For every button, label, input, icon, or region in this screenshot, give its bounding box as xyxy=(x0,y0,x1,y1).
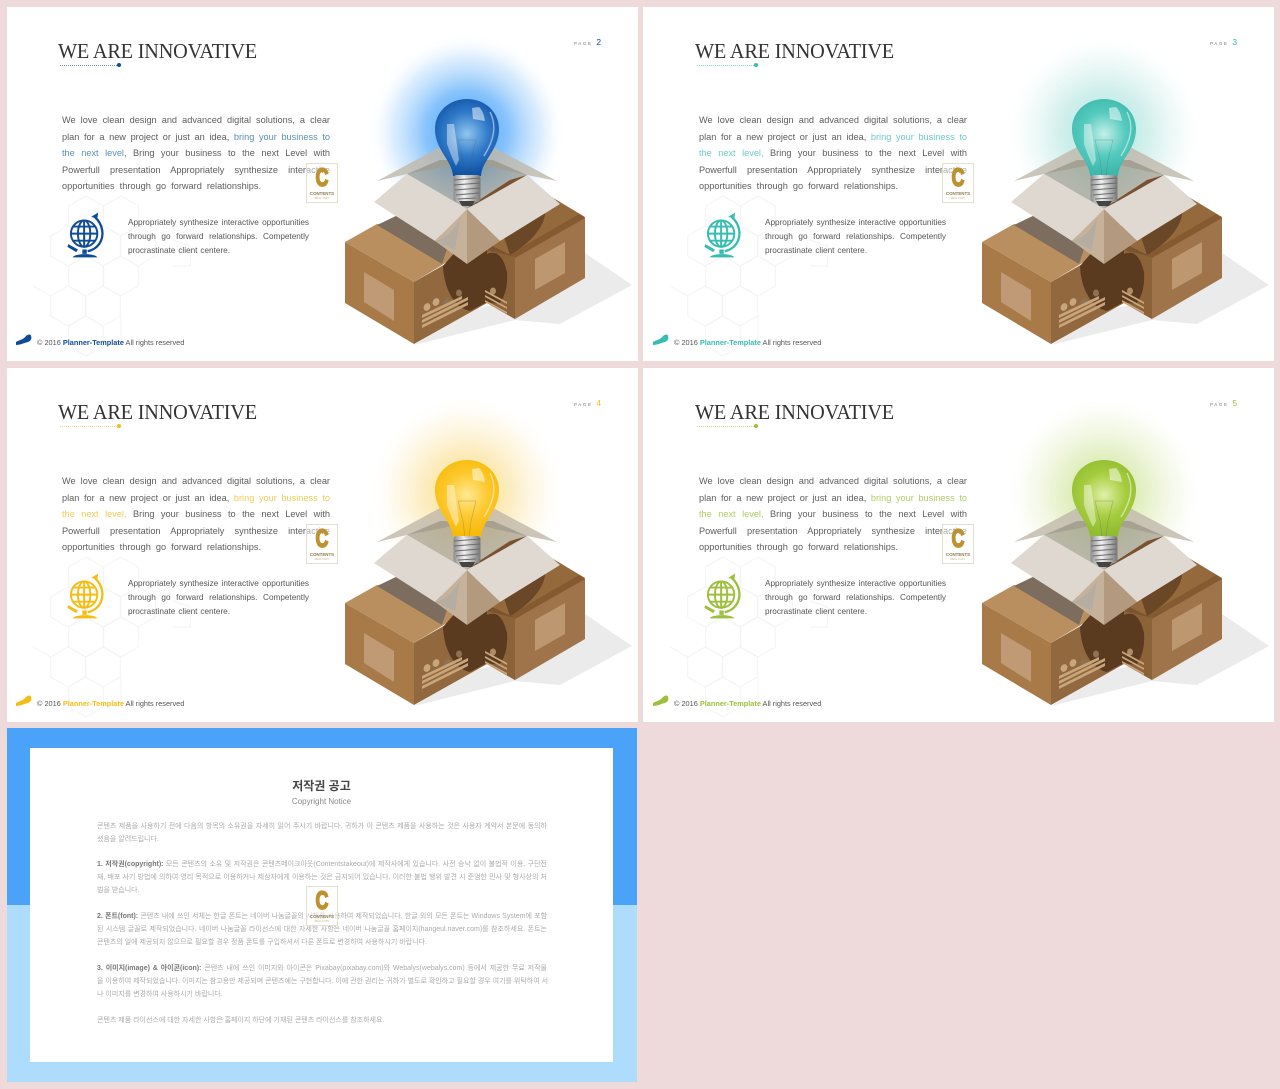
section 2 line 3: 콘텐츠의 일에 제공되지 않으므로 필요할 경우 정품 폰트를 구입하셔서 다른 폰트로 변경하여 사용하시기 바랍니다. xyxy=(97,939,427,946)
watermark xyxy=(942,163,974,203)
watermark: REAL COPY xyxy=(315,558,329,561)
watermark: CONTENTS xyxy=(310,191,334,196)
icon: shoe xyxy=(16,334,32,345)
illustration: blue bulb in box xyxy=(34,45,632,356)
panel: copyright notice background xyxy=(7,728,637,1082)
sub paragraph: through go forward relationships. Competently xyxy=(128,593,309,602)
sub paragraph: procrastinate client centere. xyxy=(128,607,230,616)
icon: shoe xyxy=(653,696,668,706)
page number: PAGE 3 xyxy=(1210,37,1237,47)
watermark: CONTENTS xyxy=(310,552,334,557)
body paragraph: opportunities through go forward relationships. xyxy=(699,542,898,552)
illustration: green bulb in box xyxy=(670,412,1268,718)
watermark: C xyxy=(316,524,328,553)
title: WE ARE INNOVATIVE xyxy=(58,400,257,424)
body paragraph: plan for a new project or just an idea, bring your business to xyxy=(62,132,330,142)
body paragraph: Powerfull presentation Appropriately synthesize interactive xyxy=(699,526,967,536)
watermark xyxy=(306,886,338,926)
panel: copyright notice xyxy=(30,748,613,1062)
body paragraph: We love clean design and advanced digital solutions, a clear xyxy=(62,115,330,125)
notice intro: 콘텐츠 제품을 사용하기 전에 다음의 항목의 소유권을 자세히 읽어 주시기 바랍니다. 귀하가 이 콘텐츠 제품을 사용하는 것은 사용자 계약서 본문에 동의하 xyxy=(97,823,547,830)
watermark: REAL COPY xyxy=(951,197,965,200)
page number: PAGE 5 xyxy=(1210,398,1237,408)
closing line: 콘텐츠 제품 라이선스에 대한 자세한 사항은 홈페이지 하단에 기재된 콘텐츠 라이선스를 참조하세요. xyxy=(97,1017,384,1024)
icon: globe xyxy=(67,212,104,258)
footer: © 2016 Planner-Template All rights reserved xyxy=(674,338,821,347)
watermark: C xyxy=(316,163,328,192)
title underline xyxy=(697,424,758,428)
watermark xyxy=(306,163,338,203)
watermark: C xyxy=(316,886,328,915)
section 1 line 2: 재, 배포 사기 방법에 의하여 영리 목적으로 이용하거나 제삼자에게 이용하는 것은 금지되어 있습니다. 이러한 불법 행위 발견 시 준엄한 민사 및 형사상의 처 xyxy=(97,874,547,881)
footer: © 2016 Planner-Template All rights reserved xyxy=(674,699,821,708)
icon: globe xyxy=(67,574,104,618)
sub paragraph xyxy=(128,218,309,255)
body paragraph: We love clean design and advanced digital solutions, a clear xyxy=(62,476,330,486)
title: WE ARE INNOVATIVE xyxy=(695,400,894,424)
body paragraph: opportunities through go forward relationships. xyxy=(699,181,898,191)
title underline xyxy=(60,424,121,428)
section 1: 1. 저작권(copyright): 모든 콘텐츠의 소유 및 저작권은 콘텐츠메이크아웃(Contentstakeout)에 제작사에게 있습니다. 사전 승낙 없이 불법적 이용, 구단전 xyxy=(97,861,547,868)
sub paragraph xyxy=(765,218,946,255)
sub paragraph: Appropriately synthesize interactive opportunities xyxy=(765,579,946,588)
sub paragraph: Appropriately synthesize interactive opportunities xyxy=(128,579,309,588)
body paragraph: Powerfull presentation Appropriately synthesize interactive xyxy=(62,526,330,536)
icon: globe xyxy=(704,574,741,618)
sub paragraph: procrastinate client centere. xyxy=(765,246,867,255)
illustration: yellow bulb in box xyxy=(34,411,632,718)
body paragraph: We love clean design and advanced digital solutions, a clear xyxy=(699,476,967,486)
title: WE ARE INNOVATIVE xyxy=(58,39,257,63)
panel: yellow innovative slide xyxy=(7,368,638,722)
footer: © 2016 Planner-Template All rights reserved xyxy=(37,699,184,708)
sub paragraph: through go forward relationships. Competently xyxy=(128,232,309,241)
sub paragraph xyxy=(765,579,946,616)
body paragraph: opportunities through go forward relationships. xyxy=(62,181,261,191)
sub paragraph: procrastinate client centere. xyxy=(765,607,867,616)
icon: shoe xyxy=(16,696,32,706)
notice heading: 저작권 공고 xyxy=(292,779,351,793)
body paragraph xyxy=(62,476,330,552)
watermark xyxy=(306,524,338,564)
section 3 line 3: 나 이미지를 변경하여 사용하시기 바랍니다. xyxy=(97,991,223,998)
watermark: REAL COPY xyxy=(315,197,329,200)
panel: teal innovative slide xyxy=(643,7,1274,361)
watermark: CONTENTS xyxy=(946,552,970,557)
body paragraph: Powerfull presentation Appropriately synthesize interactive xyxy=(699,165,967,175)
title underline xyxy=(697,63,758,67)
watermark: CONTENTS xyxy=(946,191,970,196)
notice subheading: Copyright Notice xyxy=(292,797,351,806)
watermark xyxy=(942,524,974,564)
title underline xyxy=(60,63,121,67)
body paragraph: the next level, Bring your business to the next Level with xyxy=(62,148,330,158)
footer: © 2016 Planner-Template All rights reserved xyxy=(37,338,184,347)
body paragraph: the next level, Bring your business to the next Level with xyxy=(699,148,967,158)
body paragraph xyxy=(62,115,330,191)
icon: shoe xyxy=(653,334,668,345)
body paragraph xyxy=(699,476,967,552)
sub paragraph: through go forward relationships. Competently xyxy=(765,593,946,602)
body paragraph: Powerfull presentation Appropriately synthesize interactive xyxy=(62,165,330,175)
panel: green innovative slide xyxy=(643,368,1274,722)
section 3 line 2: 을 이용하여 제작되었습니다. 이미지는 참고용만 제공되며 콘텐츠에는 구현합니다. 이에 관한 권리는 귀하가 별도로 확인하고 필요할 경우 여기를 위탁하여 서 xyxy=(97,978,548,985)
body paragraph: plan for a new project or just an idea, bring your business to xyxy=(699,132,967,142)
watermark: REAL COPY xyxy=(315,920,329,923)
sub paragraph xyxy=(128,579,309,616)
body paragraph: plan for a new project or just an idea, bring your business to xyxy=(62,493,330,503)
illustration: teal bulb in box xyxy=(670,52,1268,356)
sub paragraph: procrastinate client centere. xyxy=(128,246,230,255)
icon: globe xyxy=(704,212,741,258)
watermark: REAL COPY xyxy=(951,558,965,561)
body paragraph: plan for a new project or just an idea, bring your business to xyxy=(699,493,967,503)
section 3: 3. 이미지(image) & 아이콘(icon): 콘텐츠 내에 쓰인 이미지와 아이콘은 Pixabay(pixabay.com)와 Webalys(webalys.com) 등에서 제공한 무료 저작물 xyxy=(97,965,547,972)
body paragraph: the next level, Bring your business to the next Level with xyxy=(699,509,967,519)
section 2 line 2: 된 시스템 글꼴로 제작되었습니다. 네이버 나눔글꼴 라이선스에 대한 자세한 사항은 네이버 나눔글꼴 홈페이지(hangeul.naver.com)를 참조하세요. 폰트는 xyxy=(97,926,547,933)
sub paragraph: through go forward relationships. Competently xyxy=(765,232,946,241)
body paragraph: We love clean design and advanced digital solutions, a clear xyxy=(699,115,967,125)
section 1 line 3: 벌을 받습니다. xyxy=(97,887,140,894)
body paragraph: the next level, Bring your business to the next Level with xyxy=(62,509,330,519)
section 2: 2. 폰트(font): 콘텐츠 내에 쓰인 서체는 한글 폰트는 네이버 나눔글꼴의 서체를 사용하여 제작되었습니다. 한글 외의 모든 폰트는 Windows System에 포함 xyxy=(97,913,547,920)
page number: PAGE 2 xyxy=(574,37,601,47)
watermark: CONTENTS xyxy=(310,914,334,919)
page number: PAGE 4 xyxy=(574,398,601,408)
watermark: C xyxy=(952,163,964,192)
notice intro line 2: 셨음을 알려드립니다. xyxy=(97,836,159,843)
watermark: C xyxy=(952,524,964,553)
panel: blue innovative slide xyxy=(7,7,638,361)
title: WE ARE INNOVATIVE xyxy=(695,39,894,63)
sub paragraph: Appropriately synthesize interactive opportunities xyxy=(765,218,946,227)
body paragraph xyxy=(699,115,967,191)
sub paragraph: Appropriately synthesize interactive opportunities xyxy=(128,218,309,227)
body paragraph: opportunities through go forward relationships. xyxy=(62,542,261,552)
